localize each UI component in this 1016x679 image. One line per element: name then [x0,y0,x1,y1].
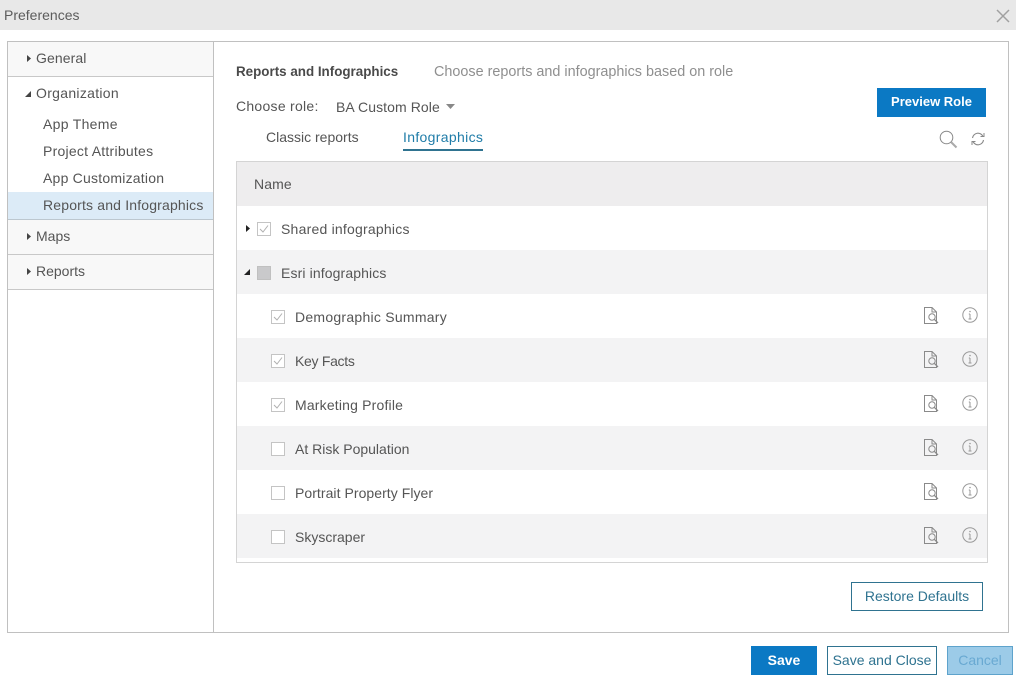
nav: General: General [36,50,87,66]
selected item: Reports and Infographics [8,192,213,220]
nav: Reports [8,255,213,290]
nav: Organization group: Project Attributes [43,143,153,159]
button: Cancel [947,646,1013,675]
row: Key Facts: Key Facts [295,353,355,369]
nav: Organization group: App Customization [43,170,164,186]
nav: Organization group [8,85,213,220]
button: Save [751,646,817,675]
nav: Maps [8,220,213,255]
table header [237,162,987,206]
nav: Organization group: App Theme [43,116,118,132]
tab: Classic reports: Classic reports [266,129,359,145]
dialog title: Preferences [4,7,79,23]
role label: Choose role: [236,98,319,114]
row: Skyscraper [237,514,987,558]
button: Save: Save [768,652,800,668]
tab: Infographics active: Infographics [403,129,483,145]
row: Skyscraper: Skyscraper [295,529,365,545]
button: Preview Role: Preview Role [891,94,972,109]
row: Portrait Property Flyer [271,483,978,501]
tab: Infographics active [403,128,483,151]
row: Esri infographics [237,250,987,294]
table header: Name [254,176,292,192]
button: Restore Defaults: Restore Defaults [865,588,969,604]
row: Shared infographics: Shared infographics [281,221,410,237]
selected item: Reports and Infographics: Reports and Infographics [43,197,204,213]
row: Esri infographics: Esri infographics [281,265,387,281]
button: Restore Defaults [851,582,983,611]
nav: Organization group: Organization [36,85,119,101]
row: Demographic Summary [271,307,978,325]
row: At Risk Population: At Risk Population [295,441,409,457]
row: Demographic Summary: Demographic Summary [295,309,447,325]
section description: Choose reports and infographics based on role [434,64,733,80]
row: Key Facts [237,338,987,382]
icon: search [940,130,958,148]
icon: close [996,10,1010,22]
role dropdown: BA Custom Role [336,99,440,115]
row: At Risk Population [237,426,987,470]
icon: refresh [972,132,984,146]
button: Save and Close: Save and Close [833,652,931,668]
row: Marketing Profile: Marketing Profile [295,397,403,413]
row: Portrait Property Flyer: Portrait Property Flyer [295,485,433,501]
panel: sidebar navigation [8,42,214,632]
row: Marketing Profile [271,395,978,413]
button: Cancel: Cancel [958,652,1002,668]
section heading: Reports and Infographics [236,64,398,79]
button: Save and Close [827,646,937,675]
nav: Maps: Maps [36,228,70,244]
nav: General [8,42,213,77]
table [236,161,988,563]
nav: Reports: Reports [36,263,85,279]
button: Preview Role [877,88,986,117]
title bar [0,0,1016,30]
